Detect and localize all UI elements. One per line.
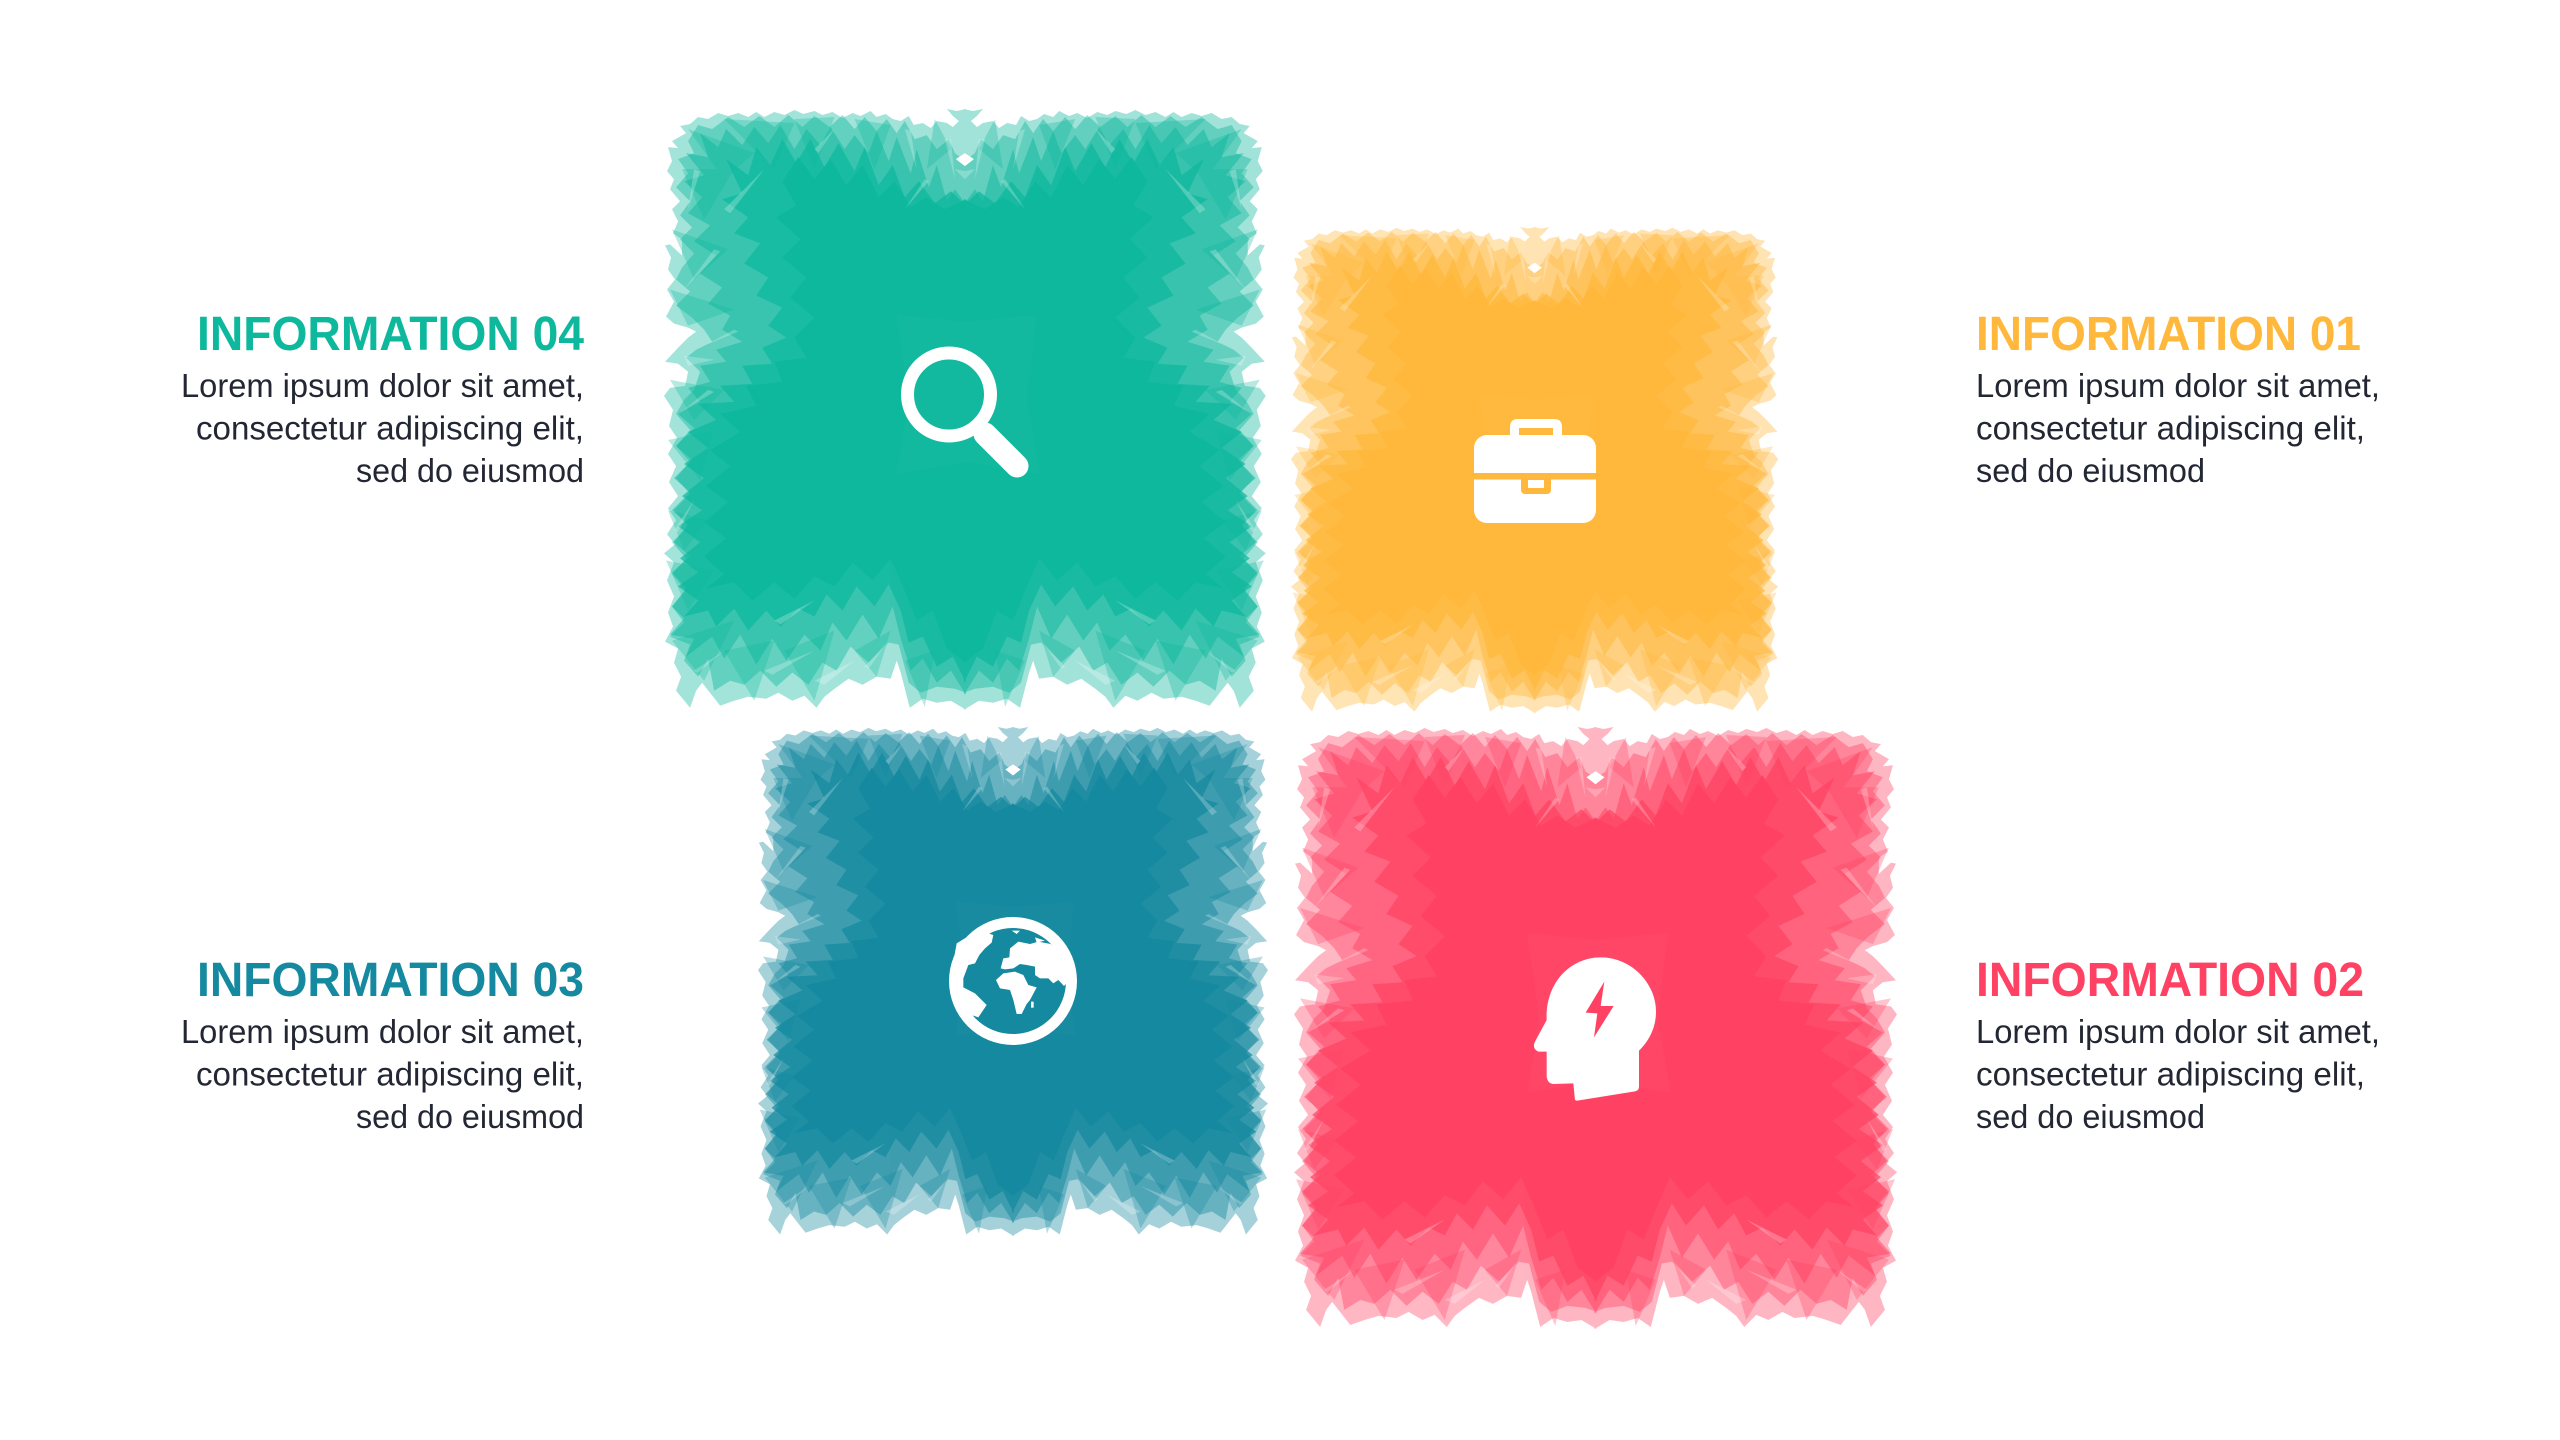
body: information 03: consectetur adipiscing elit, (196, 1056, 584, 1092)
body: information 01: consectetur adipiscing elit, (1976, 410, 2365, 446)
text block: information 02 (1976, 954, 2380, 1135)
yellow watercolor square (1291, 227, 1778, 713)
heading: information 04: INFORMATION 04 (197, 308, 584, 361)
teal watercolor square (758, 727, 1268, 1236)
icon: briefcase (1474, 419, 1596, 523)
body: information 01: sed do eiusmod (1976, 452, 2205, 489)
body: information 03: Lorem ipsum dolor sit amet, (181, 1013, 584, 1050)
green watercolor square (664, 109, 1266, 710)
red watercolor square (1294, 727, 1897, 1329)
panel: information 01 yellow square (1291, 227, 1778, 713)
body: information 02: consectetur adipiscing elit, (1976, 1056, 2365, 1092)
body: information 04: Lorem ipsum dolor sit amet, (181, 367, 584, 404)
body: information 01: Lorem ipsum dolor sit amet, (1976, 367, 2380, 404)
body: information 04 (181, 367, 584, 489)
body: information 04: sed do eiusmod (356, 452, 584, 489)
body: information 02: sed do eiusmod (1976, 1098, 2205, 1135)
icon: head with lightning bolt (1534, 957, 1656, 1101)
body: information 02 (1976, 1013, 2380, 1135)
body: information 03 (181, 1013, 584, 1135)
heading: information 01: INFORMATION 01 (1976, 308, 2361, 361)
text block: information 04 (181, 308, 584, 489)
panel: information 03 teal square (758, 727, 1268, 1236)
body: information 04: consectetur adipiscing elit, (196, 410, 584, 446)
heading: information 02: INFORMATION 02 (1976, 954, 2364, 1007)
heading: information 03: INFORMATION 03 (197, 954, 584, 1007)
text block: information 03 (181, 954, 584, 1135)
body: information 03: sed do eiusmod (356, 1098, 584, 1135)
body: information 02: Lorem ipsum dolor sit amet, (1976, 1013, 2380, 1050)
text block: information 01 (1976, 308, 2380, 489)
panel: information 04 green square (664, 109, 1266, 710)
panel: information 02 red square (1294, 727, 1897, 1329)
icon: magnifying glass (908, 353, 1017, 466)
icon: globe (949, 917, 1077, 1045)
body: information 01 (1976, 367, 2380, 489)
